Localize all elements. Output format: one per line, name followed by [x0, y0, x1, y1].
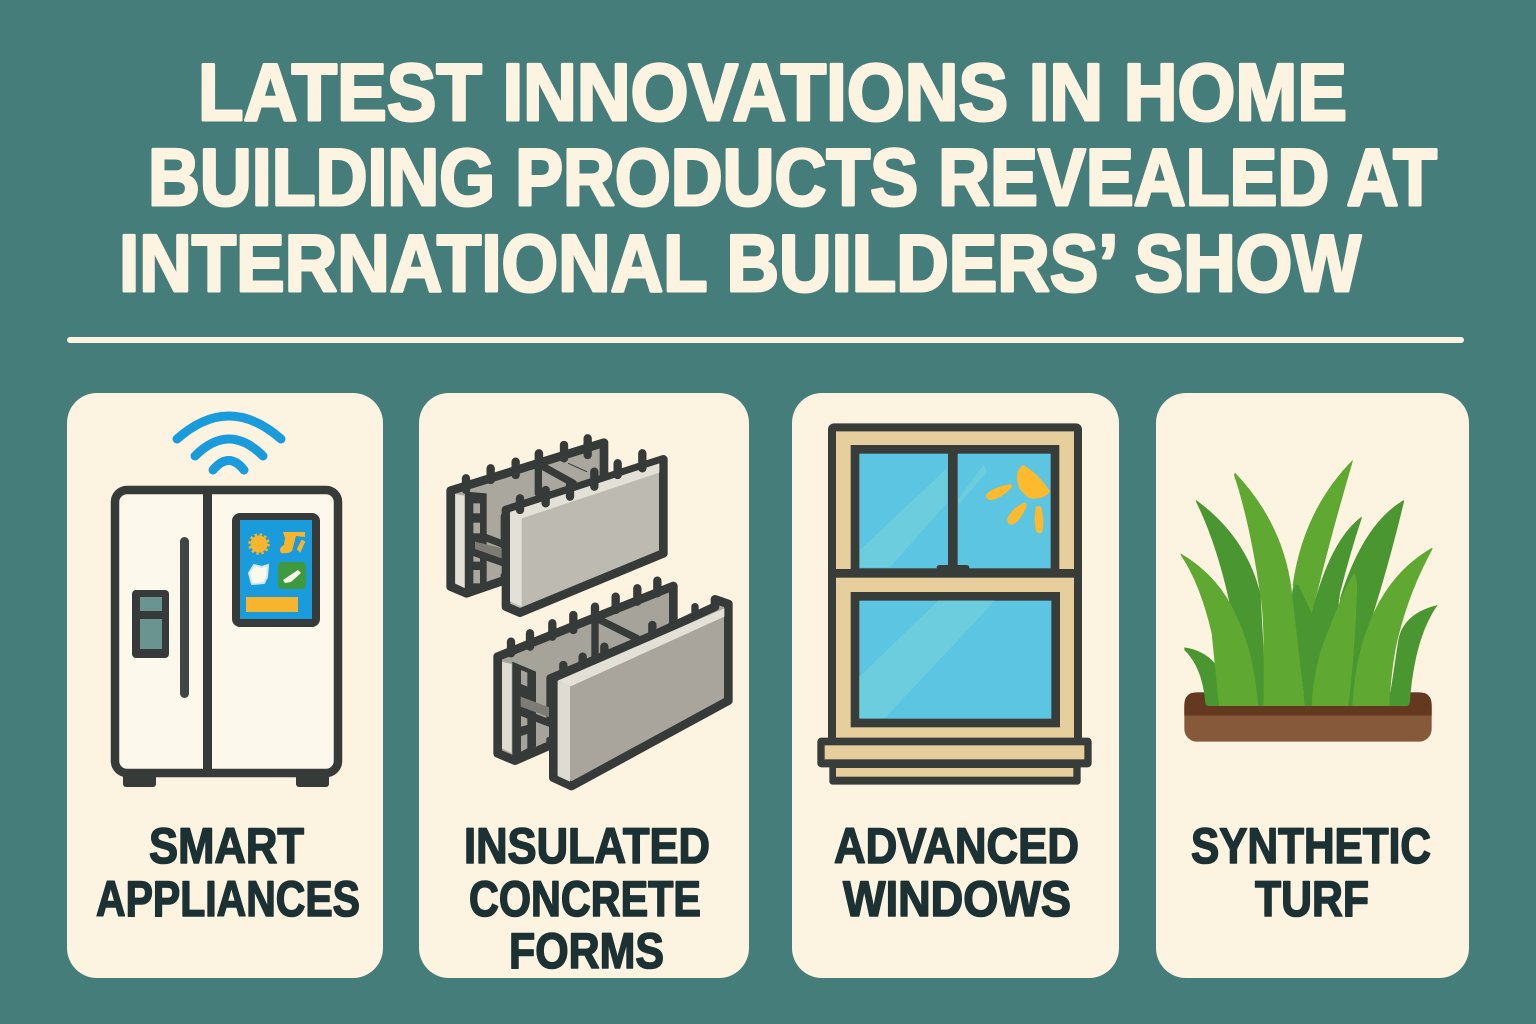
label: smart appliances: SMART: [149, 818, 304, 874]
icon: insulated concrete form blocks: [451, 438, 728, 786]
sun: [986, 465, 1050, 533]
grass blades: [1181, 460, 1438, 706]
label: insulated concrete forms: CONCRETE: [469, 871, 701, 927]
panel: synthetic turf: [1156, 393, 1469, 978]
label: synthetic turf: TURF: [1255, 871, 1369, 927]
icon: wifi signal: [177, 416, 281, 470]
label: smart appliances: [96, 818, 360, 927]
label: insulated concrete forms: INSULATED: [464, 818, 710, 874]
label: insulated concrete forms: FORMS: [509, 923, 664, 979]
lower block: [498, 581, 728, 786]
touch screen: [232, 513, 320, 627]
icon: double-hung window: [817, 427, 1092, 785]
label: advanced windows: ADVANCED: [834, 818, 1079, 874]
dispenser: [132, 590, 169, 658]
upper block: [451, 438, 663, 613]
label: insulated concrete forms: [464, 818, 710, 979]
panel: insulated concrete forms: [419, 393, 749, 979]
label: synthetic turf: [1191, 818, 1431, 927]
soil: [1184, 692, 1432, 742]
label: synthetic turf: SYNTHETIC: [1191, 818, 1431, 874]
lower sash: [855, 596, 1056, 723]
icon: smart refrigerator: [115, 490, 338, 787]
icon: turf: [1181, 460, 1438, 742]
panel: smart appliances: [67, 393, 383, 978]
upper sash: [855, 449, 1055, 573]
label: advanced windows: [834, 818, 1079, 927]
panel: advanced windows: [792, 393, 1119, 978]
title: LATEST INNOVATIONS IN HOME: [198, 48, 1347, 138]
sill: [817, 738, 1092, 785]
label: smart appliances: APPLIANCES: [96, 871, 360, 927]
label: advanced windows: WINDOWS: [843, 871, 1071, 927]
title: INTERNATIONAL BUILDERS’ SHOW: [119, 219, 1361, 309]
title: [119, 48, 1437, 309]
